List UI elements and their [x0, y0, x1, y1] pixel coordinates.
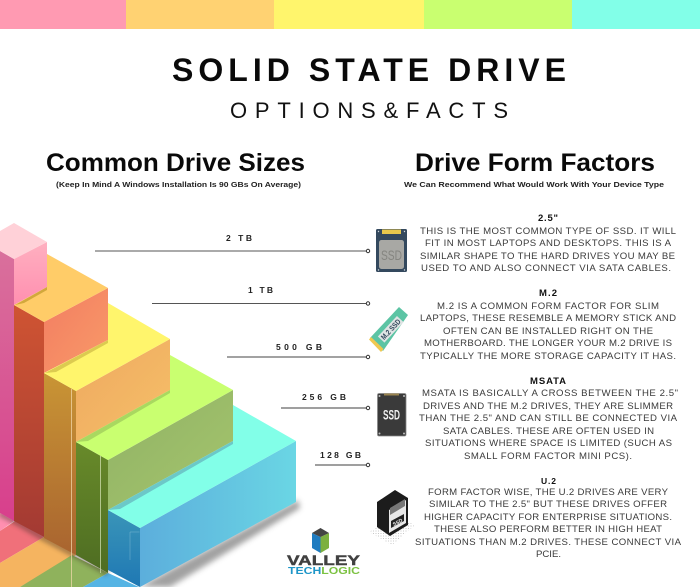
- text block: U.2: THESE ALSO PERFORM BETTER IN HIGH HEAT: [434, 524, 662, 535]
- icon: U.2 SSD: SSD: [392, 518, 404, 528]
- text block: mSATA: SITUATIONS WHERE SPACE IS LIMITED (SUCH AS: [425, 438, 672, 449]
- step: 1 TB orange: [14, 254, 108, 537]
- logo: Valley TechLogic: TECH LOGIC: [288, 566, 360, 577]
- leader: 256 GB: [281, 392, 370, 410]
- heading: common drive sizes: Common Drive Sizes: [46, 149, 305, 177]
- text block: M.2: OFTEN CAN BE INSTALLED RIGHT ON THE: [443, 326, 653, 337]
- title: SOLID STATE DRIVE: [172, 52, 566, 88]
- colour bar header: [0, 0, 700, 29]
- text block: U.2: [415, 476, 682, 560]
- leader: 1 TB: [152, 285, 370, 305]
- leader: 128 GB: 128 GB: [320, 450, 361, 460]
- step: 256 GB green: [76, 355, 233, 573]
- text block: M.2: M.2 IS A COMMON FORM FACTOR FOR SLIM: [437, 301, 659, 312]
- note: recommendation: We Can Recommend What Would Work With Your Device Type: [404, 180, 664, 189]
- text block: mSATA: THAN THE 2.5" AND CAN STILL BE CONNECTED VIA: [419, 413, 678, 424]
- logo: Valley TechLogic: VALLEY: [287, 553, 360, 568]
- text block: U.2: HIGHER CAPACITY FOR ENTERPRISE SITUATIONS.: [424, 512, 672, 523]
- icon: mSATA SSD: SSD: [383, 408, 400, 422]
- text block: M.2: M.2: [539, 288, 557, 299]
- isometric staircase chart: [0, 223, 300, 587]
- text block: 2.5 inch: SIMILAR SHAPE TO THE HARD DRIVES YOU MAY BE: [420, 251, 675, 262]
- leader: 2 TB: [95, 233, 370, 253]
- leader: 500 GB: 500 GB: [276, 342, 322, 352]
- text block: mSATA: SATA CABLES. THESE ARE OFTEN USED IN: [443, 426, 654, 437]
- heading: drive form factors: Drive Form Factors: [415, 149, 655, 177]
- leader: 2 TB: 2 TB: [226, 233, 252, 243]
- text block: mSATA: SMALL FORM FACTOR MINI PCS).: [464, 451, 632, 462]
- step: 2 TB pink: [0, 223, 47, 521]
- floor bands: [0, 513, 139, 587]
- step: 128 GB cyan: [108, 405, 296, 587]
- icon: M.2 SSD: [369, 307, 408, 352]
- text block: 2.5 inch: FIT IN MOST LAPTOPS AND DESKTOPS. THIS IS A: [425, 238, 672, 249]
- icon: U.2 SSD: [369, 490, 415, 545]
- text block: 2.5 inch: THIS IS THE MOST COMMON TYPE OF SSD. IT WILL: [420, 226, 677, 237]
- text block: mSATA: [419, 376, 678, 462]
- text block: mSATA: MSATA IS BASICALLY A CROSS BETWEEN THE 2.5": [422, 388, 678, 399]
- icon: 2.5 inch SSD: SSD: [381, 247, 402, 263]
- leader: 500 GB: [227, 342, 370, 359]
- text block: 2.5 inch: 2.5": [538, 213, 558, 224]
- subtitle: OPTIONS&FACTS: [230, 98, 508, 123]
- text block: U.2: PCIE.: [536, 549, 561, 560]
- note: windows installation: (Keep In Mind A Windows Installation Is 90 GBs On Average): [56, 180, 302, 189]
- text block: U.2: U.2: [541, 476, 556, 486]
- text block: mSATA: MSATA: [530, 376, 566, 387]
- leader: 1 TB: 1 TB: [248, 285, 273, 295]
- drop shadow: [139, 500, 300, 587]
- text block: M.2: LAPTOPS, THESE RESEMBLE A MEMORY STICK AND: [420, 313, 676, 324]
- icon: M.2 SSD: M.2 SSD: [379, 317, 403, 342]
- leader: 128 GB: [315, 450, 370, 467]
- logo: Valley TechLogic: [287, 528, 360, 577]
- leader: 256 GB: 256 GB: [302, 392, 346, 402]
- text block: M.2: MOTHERBOARD. THE LONGER YOUR M.2 DRIVE IS: [424, 338, 672, 349]
- icon: mSATA SSD: [378, 394, 406, 436]
- text block: 2.5 inch: [420, 213, 677, 274]
- icon: 2.5 inch SSD: [376, 229, 407, 272]
- text block: M.2: TYPICALLY THE MORE STORAGE CAPACITY IT HAS.: [420, 351, 676, 362]
- text block: M.2: [420, 288, 676, 362]
- step: 500 GB yellow: [44, 303, 170, 587]
- text block: U.2: FORM FACTOR WISE, THE U.2 DRIVES ARE VERY: [428, 487, 669, 498]
- text block: U.2: SITUATIONS THAN M.2 DRIVES. THESE CONNECT VIA: [415, 537, 682, 548]
- text block: U.2: SIMILAR TO THE 2.5" BUT THESE DRIVES OFFER: [429, 499, 667, 510]
- text block: mSATA: DRIVES AND THE M.2 DRIVES, THEY ARE SLIMMER: [423, 401, 673, 412]
- text block: 2.5 inch: USED TO AND ALSO CONNECT VIA SATA CABLES.: [421, 263, 671, 274]
